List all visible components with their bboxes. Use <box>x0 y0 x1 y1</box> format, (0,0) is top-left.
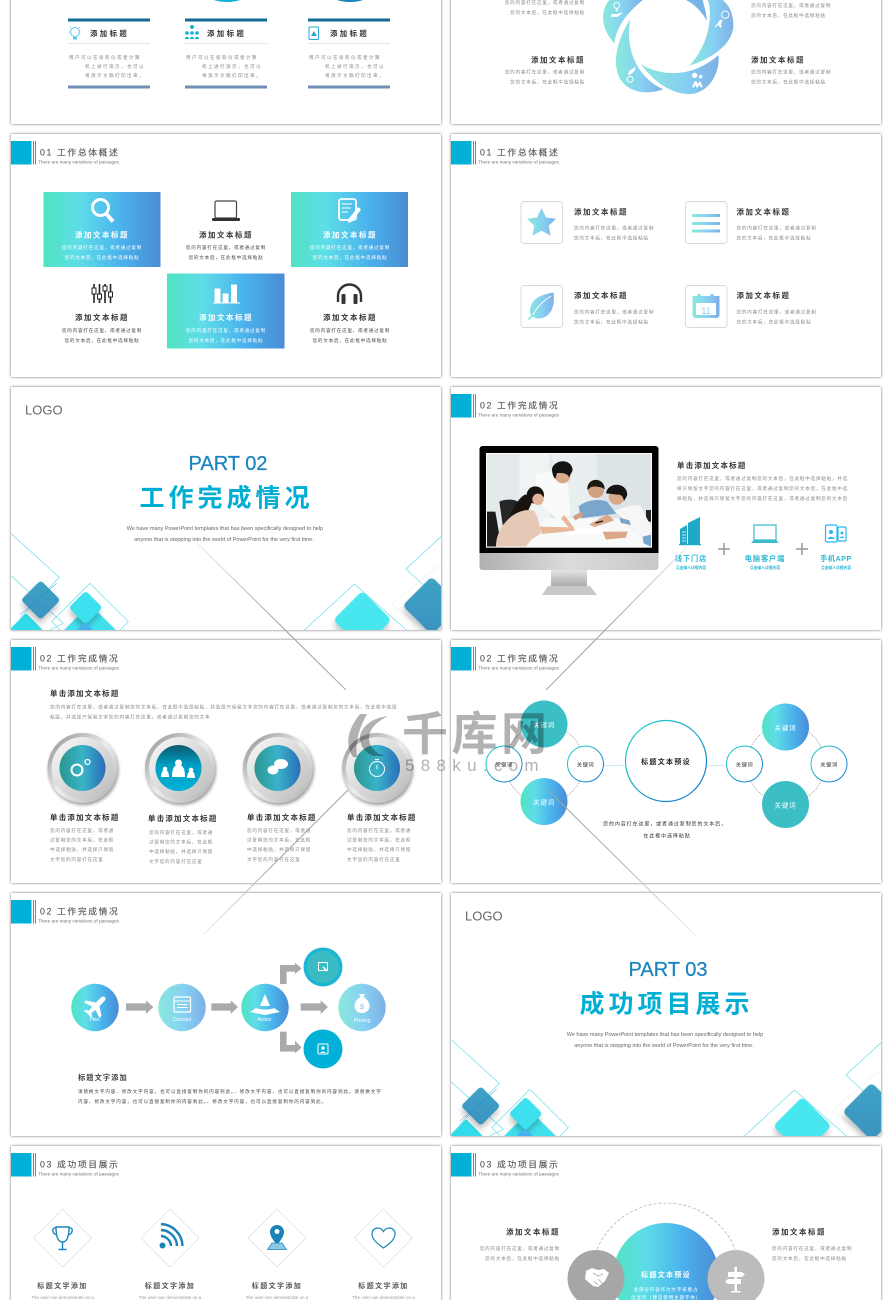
card 3 document: 您的文本后，在此框中选择粘贴 <box>313 254 387 261</box>
left text lower: 您的文本后，在此框中选择粘贴 <box>510 78 585 86</box>
column 3: 将演示文稿打印出来。 <box>325 72 385 79</box>
circle item 3 chat: 您的内容打在这里，或者通 <box>247 827 311 834</box>
left text upper: 您的文本后，在此框中选择粘贴 <box>510 9 585 16</box>
circle item 1 gears: 您的内容打在这里，或者通 <box>50 827 114 834</box>
node plan <box>71 984 119 1031</box>
item menu lines: 您的文本后，在此框中选择粘贴 <box>736 234 811 242</box>
intro text: 择只保留文字您的内容打在这里，或者通过复制您的文本后，在此框中选 <box>677 485 848 492</box>
diagonal line top left to center <box>197 543 346 690</box>
header <box>11 141 120 164</box>
header: There are many variations of passages <box>38 1172 120 1176</box>
item menu lines <box>686 202 817 244</box>
part title: 成功项目展示 <box>579 990 754 1018</box>
card 4 sliders <box>62 284 142 344</box>
header: 02 工作完成情况 <box>40 652 119 664</box>
left text upper: 您的内容打在这里，或者通过复制 <box>505 0 585 6</box>
column 2: 将演示文稿打印出来。 <box>202 72 262 79</box>
item trophy <box>31 1209 94 1300</box>
right text lower: 您的文本后，在此框中选择粘贴 <box>751 78 826 86</box>
right text lower: 您的内容打在这里，或者通过复制 <box>751 68 831 76</box>
part number: PART 02 <box>189 453 267 475</box>
circle item 4 stopwatch: 文字您的内容打在这里 <box>347 856 400 863</box>
header <box>11 647 120 670</box>
decorative diamonds <box>451 1039 881 1136</box>
intro text: 择粘贴，并选择只保留文字您的内容打在这里，或者通过复制您的文本后 <box>677 495 848 502</box>
intro text <box>677 461 848 502</box>
light dotted links <box>604 764 726 766</box>
slide: four diamond icons <box>11 1146 441 1300</box>
right text <box>772 1228 852 1262</box>
card 4 sliders: 您的内容打在这里，或者通过复制 <box>62 327 142 334</box>
logo: LOGO <box>465 908 503 924</box>
left cluster: 关键词 <box>495 760 513 768</box>
left cluster <box>486 700 604 825</box>
channel pc client <box>745 525 785 570</box>
item star <box>521 202 654 244</box>
intro text: We have many PowerPoint templates that has been specifically designed to help <box>127 526 323 532</box>
card 2 laptop: 您的内容打在这里，或者通过复制 <box>186 244 266 251</box>
plus two <box>796 543 808 555</box>
channel mobile app: 点击输入详细内容 <box>821 565 851 570</box>
right text: 您的内容打在这里，或者通过复制 <box>772 1245 852 1252</box>
card 1 search <box>44 192 160 267</box>
card 5 bar chart <box>167 274 284 348</box>
watermark url: 588ku.com <box>405 756 545 775</box>
circle item 3 chat: 过复制您的文本后，在此框 <box>247 836 311 844</box>
card 3 document <box>291 192 408 267</box>
header <box>11 1153 120 1176</box>
header: 02 工作完成情况 <box>40 906 119 916</box>
item leaf: 您的文本后，在此框中选择粘贴 <box>574 318 649 326</box>
item map pin <box>246 1209 309 1300</box>
item map pin: 标题文字添加 <box>252 1281 302 1290</box>
item calendar <box>686 286 817 328</box>
flow description: 标题文字添加 <box>78 1073 128 1082</box>
circle item 4 stopwatch <box>342 733 417 863</box>
circle item 1 gears <box>48 733 120 863</box>
circle item 3 chat <box>243 733 317 863</box>
item calendar: 11 <box>701 306 711 316</box>
item star: 您的内容打在这里，或者通过复制 <box>574 224 654 232</box>
item leaf: 您的内容打在这里，或者通过复制 <box>574 308 654 316</box>
right cluster: 关键词 <box>820 760 838 768</box>
watermark logo <box>348 714 388 757</box>
part number: PART 03 <box>629 959 707 981</box>
left text: 添加文本标题 <box>506 1228 560 1236</box>
node plan: Plan <box>89 1017 100 1023</box>
intro text: 您的内容打在这里，或者通过复制您的文本后，在此框中选择粘贴，并选 <box>677 475 848 482</box>
channel offline store <box>675 517 707 570</box>
slide: five petal flower diagram <box>451 0 881 124</box>
slide: four icon boxes <box>451 134 881 377</box>
header: There are many variations of passages <box>38 160 120 164</box>
intro text: We have many PowerPoint templates that has been specifically designed to help <box>567 1032 763 1038</box>
right text: 您的文本后，在此框中选择粘贴 <box>772 1255 847 1262</box>
node concept: Concept <box>173 1017 192 1023</box>
right text lower: 添加文本标题 <box>751 56 805 64</box>
header: 03 成功项目展示 <box>40 1158 119 1170</box>
card 2 laptop <box>186 201 266 261</box>
gray circle handshake <box>568 1250 624 1300</box>
flow description: 内容、修改文字内容，也可以直接复制你的内容到此。、修改文字内容，也可以直接复制你的内容到此。 <box>78 1098 327 1105</box>
column 2: 机上进行演示，也可以 <box>202 63 262 70</box>
flow description: 请替换文字内容、修改文字内容，也可以直接复制你的内容到此。、修改文字内容，也可以直接复制你的内容到此。请替换文字 <box>78 1088 382 1095</box>
card 1 search: 您的内容打在这里，或者通过复制 <box>62 244 142 251</box>
central gradient circle: 此部分内容作为文字排版占 <box>634 1286 698 1293</box>
right cluster: 关键词 <box>775 723 796 732</box>
central gradient circle: 标题文本预设 <box>641 1270 691 1279</box>
header <box>451 647 560 670</box>
left cluster: 关键词 <box>577 760 594 768</box>
card 5 bar chart: 添加文本标题 <box>199 313 253 322</box>
intro text <box>567 1032 763 1049</box>
circle item 2 people: 您的内容打在这里，或者通 <box>149 829 213 836</box>
column 1: 用户可以在投影仪或者计算 <box>69 54 141 61</box>
card 6 headphones: 您的内容打在这里，或者通过复制 <box>310 327 390 334</box>
channel mobile app <box>820 525 852 570</box>
slide: process flow <box>11 893 441 1136</box>
header: 01 工作总体概述 <box>40 146 119 158</box>
circle item 4 stopwatch: 您的内容打在这里，或者通 <box>347 827 411 834</box>
card 6 headphones <box>310 284 390 344</box>
column 1: 机上进行演示，也可以 <box>85 63 145 70</box>
card 2 laptop: 您的文本后，在此框中选择粘贴 <box>189 254 263 261</box>
node pricing: Pricing <box>354 1018 370 1024</box>
circle item 4 stopwatch: 中选择粘贴，并选择只保留 <box>347 846 411 853</box>
slide: four metallic circles <box>11 640 441 883</box>
node top tool <box>304 948 342 986</box>
column 1 <box>68 18 150 88</box>
intro text: anyone that is stepping into the world of PowerPoint for the very first time. <box>574 1043 754 1049</box>
left text upper <box>505 0 585 16</box>
item star: 您的文本后，在此框中选择粘贴 <box>574 234 649 242</box>
node bottom person <box>304 1030 342 1068</box>
central circle: 标题文本预设 <box>641 757 691 766</box>
circle item 3 chat: 文字您的内容打在这里 <box>247 856 300 863</box>
header <box>451 141 560 164</box>
circle item 4 stopwatch: 单击添加文本标题 <box>347 813 417 822</box>
header: 01 工作总体概述 <box>480 146 559 158</box>
column 3: 机上进行演示，也可以 <box>325 63 385 70</box>
item wifi signal: 标题文字添加 <box>145 1281 195 1290</box>
left text: 您的文本后，在此框中选择粘贴 <box>485 1255 560 1262</box>
header: There are many variations of passages <box>38 918 120 924</box>
circle item 2 people: 过复制您的文本后，在此框 <box>149 838 213 846</box>
channel pc client: 点击输入详细内容 <box>750 565 780 570</box>
circle item 4 stopwatch: 过复制您的文本后，在此框 <box>347 836 411 844</box>
header <box>451 1153 560 1176</box>
card 2 laptop: 添加文本标题 <box>199 230 253 240</box>
node action <box>241 984 289 1031</box>
item heart: The user can demonstrate on a <box>352 1295 415 1300</box>
monitor <box>480 446 658 595</box>
diagonal line top right to center <box>546 548 686 690</box>
item trophy: The user can demonstrate on a <box>31 1295 94 1300</box>
right text upper: 您的文本后，在此框中选择粘贴 <box>751 12 826 19</box>
item heart: 标题文字添加 <box>358 1281 409 1290</box>
item trophy: 标题文字添加 <box>37 1281 88 1290</box>
left cluster: 关键词 <box>533 798 555 806</box>
item wifi signal: The user can demonstrate on a <box>139 1295 202 1300</box>
left text: 您的内容打在这里，或者通过复制 <box>480 1245 560 1252</box>
header: There are many variations of passages <box>38 666 120 670</box>
slide: six cards overview <box>11 134 441 377</box>
slide: monitor with text <box>451 387 881 630</box>
column 1: 将演示文稿打印出来。 <box>85 72 145 79</box>
caption: 您的内容打在这里，或者通过复制您的文本后， <box>603 820 727 828</box>
gray flow arrows <box>126 963 328 1053</box>
item menu lines: 您的内容打在这里，或者通过复制 <box>736 224 817 232</box>
gray circle signpost <box>708 1250 764 1300</box>
circle item 1 gears: 中选择粘贴，并选择只保留 <box>50 846 114 853</box>
card 5 bar chart: 您的内容打在这里，或者通过复制 <box>186 327 266 334</box>
channel mobile app: 手机APP <box>820 554 852 563</box>
header: 02 工作完成情况 <box>480 400 559 410</box>
central gradient circle <box>613 1223 719 1300</box>
intro text <box>50 689 397 720</box>
node concept <box>158 984 206 1031</box>
item wifi signal <box>139 1209 202 1300</box>
item calendar: 添加文本标题 <box>736 291 790 300</box>
circle item 2 people <box>145 733 218 865</box>
office team photo <box>486 453 652 548</box>
item leaf <box>521 286 654 328</box>
column 3 <box>308 18 390 88</box>
column 3: 用户可以在投影仪或者计算 <box>309 54 381 61</box>
item map pin: The user can demonstrate on a <box>246 1295 309 1300</box>
watermark <box>348 708 550 775</box>
node pricing <box>338 984 386 1031</box>
item heart <box>352 1209 415 1300</box>
header: 02 工作完成情况 <box>480 652 559 664</box>
card 3 document: 您的内容打在这里，或者通过复制 <box>310 244 390 251</box>
circle item 1 gears: 过复制您的文本后，在此框 <box>50 836 114 844</box>
card 5 bar chart: 您的文本后，在此框中选择粘贴 <box>189 337 263 344</box>
left text <box>480 1228 560 1262</box>
diagonal line bottom right from center <box>548 790 695 935</box>
card 4 sliders: 添加文本标题 <box>75 313 129 322</box>
decorative diamonds <box>11 533 441 630</box>
column 2: 用户可以在投影仪或者计算 <box>186 54 258 61</box>
header: There are many variations of passages <box>478 160 560 164</box>
item star: 添加文本标题 <box>574 208 628 216</box>
watermark wordmark: 千库网 <box>402 708 550 760</box>
slide: three feature columns <box>11 0 441 124</box>
card 6 headphones: 您的文本后，在此框中选择粘贴 <box>313 337 387 344</box>
slide: part 02 cover <box>9 385 443 632</box>
right cluster <box>726 704 847 828</box>
header: There are many variations of passages <box>478 666 560 670</box>
intro text: 单击添加文本标题 <box>677 461 747 470</box>
card 6 headphones: 添加文本标题 <box>323 313 377 322</box>
right cluster: 关键词 <box>775 800 796 810</box>
caption <box>603 820 727 840</box>
intro text: 单击添加文本标题 <box>50 689 120 698</box>
circle item 3 chat: 中选择粘贴，并选择只保留 <box>247 846 311 853</box>
flow description <box>78 1073 382 1105</box>
dashed arc <box>597 1203 735 1249</box>
header: There are many variations of passages <box>478 412 560 418</box>
dotted connectors <box>506 725 825 803</box>
column 1: 添加标题 <box>90 29 129 38</box>
column 2 <box>185 18 267 88</box>
column 3: 添加标题 <box>330 29 369 38</box>
card 4 sliders: 您的文本后，在此框中选择粘贴 <box>65 337 139 344</box>
right text upper: 您的内容打在这里，或者通过复制 <box>751 2 831 9</box>
channel pc client: 电脑客户端 <box>745 554 785 563</box>
circle item 2 people: 单击添加文本标题 <box>148 814 218 823</box>
right text: 添加文本标题 <box>772 1228 826 1236</box>
intro text <box>127 526 323 543</box>
slide: part 03 cover <box>449 891 883 1138</box>
diagonal line bottom left from center <box>203 790 348 935</box>
circle item 1 gears: 文字您的内容打在这里 <box>50 856 103 863</box>
node action: Action <box>258 1017 272 1023</box>
logo: LOGO <box>25 402 63 418</box>
left cluster: 关键词 <box>533 720 555 729</box>
circle item 2 people: 中选择粘贴，并选择只保留 <box>149 848 213 855</box>
flower petals <box>603 0 733 94</box>
slide: central circle with side text <box>451 1146 881 1300</box>
caption: 在此框中选择粘贴 <box>643 832 691 840</box>
card 1 search: 添加文本标题 <box>75 230 129 240</box>
item leaf: 添加文本标题 <box>574 291 628 300</box>
left text lower: 添加文本标题 <box>531 56 585 64</box>
card 3 document: 添加文本标题 <box>323 230 377 240</box>
right cluster: 关键词 <box>736 760 753 768</box>
channel offline store: 线下门店 <box>675 554 707 563</box>
part title: 工作完成情况 <box>139 484 314 512</box>
intro text: anyone that is stepping into the world of PowerPoint for the very first time. <box>134 537 314 543</box>
item calendar: 您的内容打在这里，或者通过复制 <box>736 308 817 316</box>
circle item 2 people: 文字您的内容打在这里 <box>149 858 202 865</box>
column 2: 添加标题 <box>207 29 246 38</box>
item menu lines: 添加文本标题 <box>736 208 790 216</box>
channel offline store: 点击输入详细内容 <box>676 565 706 570</box>
header <box>11 900 120 924</box>
header: 03 成功项目展示 <box>480 1158 559 1170</box>
node pricing: $ <box>360 1004 364 1011</box>
header <box>451 394 560 418</box>
right text upper <box>751 2 831 19</box>
plus one <box>718 543 730 555</box>
circle item 3 chat: 单击添加文本标题 <box>247 813 317 822</box>
left text lower: 您的内容打在这里，或者通过复制 <box>505 68 585 76</box>
central gradient circle: 位显示（建议使用主题字体） <box>631 1294 701 1300</box>
intro text: 粘贴，并选择只保留文字您的内容打在这里，或者通过复制您的文本 <box>50 714 210 720</box>
circle item 1 gears: 单击添加文本标题 <box>50 813 120 822</box>
left text lower <box>505 56 585 86</box>
card 1 search: 您的文本后，在此框中选择粘贴 <box>65 254 139 261</box>
slide: keyword circles <box>451 640 881 883</box>
central circle <box>626 720 706 802</box>
intro text: 您的内容打在这里，或者通过复制您的文本后，在此框中选择粘贴，并选择只保留文字您的内容打在这里，或者通过复制您的文本后，在此框中选择 <box>50 704 397 710</box>
right text lower <box>751 56 831 86</box>
item calendar: 您的文本后，在此框中选择粘贴 <box>736 318 811 326</box>
header: There are many variations of passages <box>478 1172 560 1176</box>
